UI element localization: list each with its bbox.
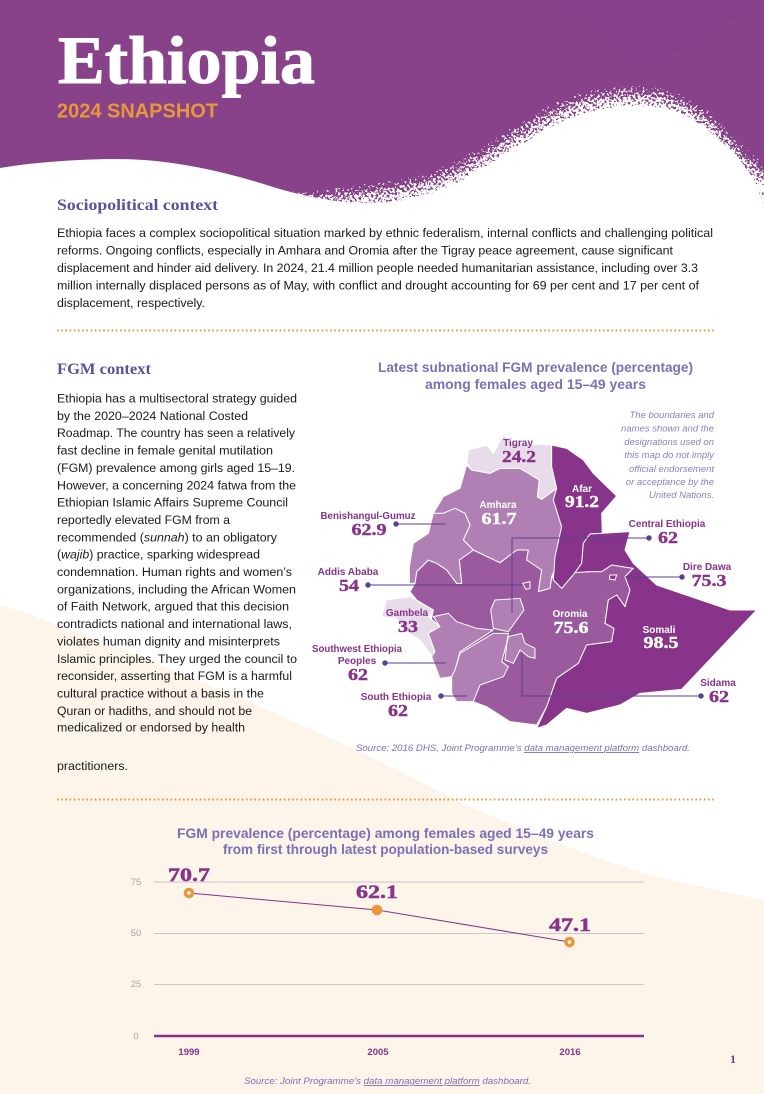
region: Central Ethiopia [491, 598, 524, 632]
label: Somali: Somali [643, 625, 676, 636]
text block: sociopolitical context [57, 226, 713, 310]
text block: sociopolitical context: displacement, respectively. [57, 296, 205, 310]
label: Southwest Ethiopia Peoples: 62 [348, 665, 368, 684]
text block: FGM context: cultural practice without a basis in the [57, 686, 264, 700]
region: Afar [552, 445, 617, 588]
line chart [131, 865, 644, 1058]
region: Amhara [433, 465, 562, 592]
label: Southwest Ethiopia Peoples: Peoples [338, 656, 377, 667]
text block: FGM context: reportedly elevated FGM from a [57, 513, 230, 527]
map leader lines [368, 524, 701, 696]
text block: FGM context: Ethiopia has a multisectoral strategy guided [57, 392, 297, 406]
map leader dots [365, 521, 704, 699]
data point 2016: 47.1 [549, 915, 591, 936]
text block: FGM context: recommended (sunnah) to an obligatory [57, 530, 278, 544]
heading: FGM context: FGM context [57, 361, 152, 378]
label: Benishangul-Gumuz: 62.9 [352, 520, 386, 539]
map source note: Source: 2016 DHS, Joint Programme’s data management platform dashboard. [356, 743, 690, 753]
region: Tigray [467, 435, 557, 499]
label: Southwest Ethiopia Peoples: Southwest Ethiopia [312, 644, 402, 655]
map of Ethiopia regions [382, 435, 757, 728]
label: Amhara: Amhara [479, 500, 517, 511]
y axis labels: 0 [133, 1031, 139, 1042]
label: Oromia: Oromia [552, 609, 588, 620]
text block: FGM context: However, a concerning 2024 fatwa from the [57, 478, 296, 492]
text block: FGM context: (wajib) practice, sparking widespread [57, 548, 260, 562]
label: South Ethiopia: South Ethiopia [361, 692, 432, 703]
text block: FGM context: (FGM) prevalence among girls aged 15–19. [57, 461, 295, 475]
label: Central Ethiopia: 62 [658, 528, 678, 547]
map disclaimer note: this map do not imply [624, 450, 715, 461]
region: Addis Ababa [523, 582, 530, 589]
chart title: from first through latest population-based surveys [223, 841, 548, 857]
text block: FGM context: organizations, including the African Women [57, 582, 296, 596]
label: Tigray: Tigray [503, 438, 533, 449]
label: Gambela [386, 608, 429, 636]
map disclaimer note: The boundaries and [629, 410, 715, 421]
label: Dire Dawa: 75.3 [692, 571, 726, 590]
x axis labels: 2005 [367, 1047, 389, 1058]
region: Somali [537, 532, 757, 728]
data point 1999: 70.7 [168, 865, 211, 886]
text block: sociopolitical context: displacement and hinder aid delivery. In 2024, 21.4 million people needed humanitarian assistance, including over 3.3 [57, 261, 698, 275]
region: Oromia [410, 550, 633, 725]
label: Addis Ababa: Addis Ababa [318, 567, 379, 578]
y axis labels: 75 [131, 877, 141, 888]
label: Oromia: 75.6 [554, 618, 588, 637]
region: Southwest Ethiopia Peoples [428, 613, 493, 678]
text block: sociopolitical context: Ethiopia faces a complex sociopolitical situation marked by ethnic federalism, internal conflicts and challenging political [57, 226, 713, 240]
data point 2005 [356, 882, 398, 915]
label: Afar: 91.2 [565, 492, 599, 511]
label: Sidama: Sidama [700, 678, 736, 689]
label: Sidama: 62 [709, 687, 729, 706]
text block: FGM context: of Faith Network, argued that this decision [57, 600, 289, 614]
map disclaimer note: designations used on [624, 437, 714, 448]
label: Benishangul-Gumuz: Benishangul-Gumuz [320, 511, 416, 522]
heading: sociopolitical context: Sociopolitical context [57, 197, 219, 214]
label: Gambela: 33 [398, 617, 418, 636]
label: Benishangul-Gumuz [320, 511, 416, 539]
title: Ethiopia [58, 22, 315, 98]
label: Somali [643, 625, 678, 652]
map disclaimer note [621, 410, 715, 501]
text block: FGM context: Ethiopian Islamic Affairs Supreme Council [57, 496, 288, 510]
map disclaimer note: or acceptance by the [626, 477, 714, 488]
label: Southwest Ethiopia Peoples [312, 644, 402, 684]
y axis labels: 50 [131, 928, 141, 939]
label: Central Ethiopia: Central Ethiopia [629, 519, 706, 530]
map title: among females aged 15–49 years [425, 376, 646, 392]
text block: FGM context: fast decline in female genital mutilation [57, 444, 273, 458]
data point 2005: 62.1 [356, 882, 398, 903]
text block: FGM context: Islamic principles. They urged the council to [57, 652, 297, 666]
cream background shape [0, 605, 764, 1094]
map disclaimer note: official endorsement [629, 464, 714, 475]
text block: sociopolitical context: million internally displaced persons as of May, with conflict and drought accounting for 69 per cent and 17 per cent of [57, 278, 700, 292]
text block: FGM context: by the 2020–2024 National Costed [57, 409, 248, 423]
region: South Ethiopia [452, 633, 508, 702]
label: Amhara: 61.7 [482, 509, 517, 528]
y axis labels [131, 877, 141, 1042]
text block: FGM context: violates human dignity and misinterprets [57, 634, 280, 648]
label: Afar [565, 484, 599, 511]
data point 2016 [549, 915, 591, 947]
label: Somali: 98.5 [644, 633, 678, 652]
label: Tigray [502, 438, 536, 466]
text block: FGM context [57, 392, 297, 773]
region: Dire Dawa [609, 575, 617, 580]
text block: FGM context: reconsider, asserting that FGM is a harmful [57, 669, 292, 683]
label: Oromia [552, 609, 588, 637]
map disclaimer note: United Nations. [649, 490, 714, 501]
chart title: FGM prevalence (percentage) among females aged 15–49 years [177, 825, 594, 841]
subtitle: 2024 SNAPSHOT [57, 100, 218, 122]
x axis labels: 2016 [559, 1047, 581, 1058]
page number: 1 [730, 1052, 736, 1066]
text block: FGM context: Roadmap. The country has seen a relatively [57, 426, 296, 440]
map title [378, 359, 693, 392]
text block: FGM context: practitioners. [57, 759, 128, 773]
label: Central Ethiopia [629, 519, 706, 547]
label: Sidama [700, 678, 736, 706]
label: Addis Ababa: 54 [339, 576, 360, 595]
text block: FGM context: contradicts national and international laws, [57, 617, 292, 631]
x axis labels [178, 1047, 581, 1058]
label: South Ethiopia: 62 [388, 701, 408, 720]
text block: sociopolitical context: reforms. Ongoing conflicts, especially in Amhara and Oromia after the Tigray peace agreement, cause significant [57, 244, 674, 258]
trend line [189, 893, 570, 942]
x axis labels: 1999 [178, 1047, 200, 1058]
label: Dire Dawa [683, 562, 732, 590]
data point 1999 [168, 865, 211, 898]
label: Addis Ababa [318, 567, 379, 595]
chart title [177, 825, 594, 857]
label: South Ethiopia [361, 692, 432, 720]
header banner with wave [0, 0, 764, 240]
text block: FGM context: condemnation. Human rights and women’s [57, 565, 292, 579]
label: Tigray: 24.2 [502, 447, 536, 466]
region: Benishangul-Gumuz [409, 508, 473, 583]
label: Gambela: Gambela [386, 608, 429, 619]
label: Dire Dawa: Dire Dawa [683, 562, 732, 573]
chart source note: Source: Joint Programme’s data management platform dashboard. [244, 1076, 531, 1086]
map disclaimer note: names shown and the [621, 424, 714, 434]
label: Afar: Afar [572, 484, 592, 495]
region: Gambela [382, 597, 440, 653]
text block: FGM context: medicalized or endorsed by health [57, 720, 245, 734]
region: Sidama [505, 633, 535, 663]
label: Amhara [479, 500, 517, 528]
map title: Latest subnational FGM prevalence (percentage) [378, 359, 693, 375]
text block: FGM context: Quran or hadiths, and should not be [57, 704, 252, 718]
y axis labels: 25 [131, 979, 141, 990]
